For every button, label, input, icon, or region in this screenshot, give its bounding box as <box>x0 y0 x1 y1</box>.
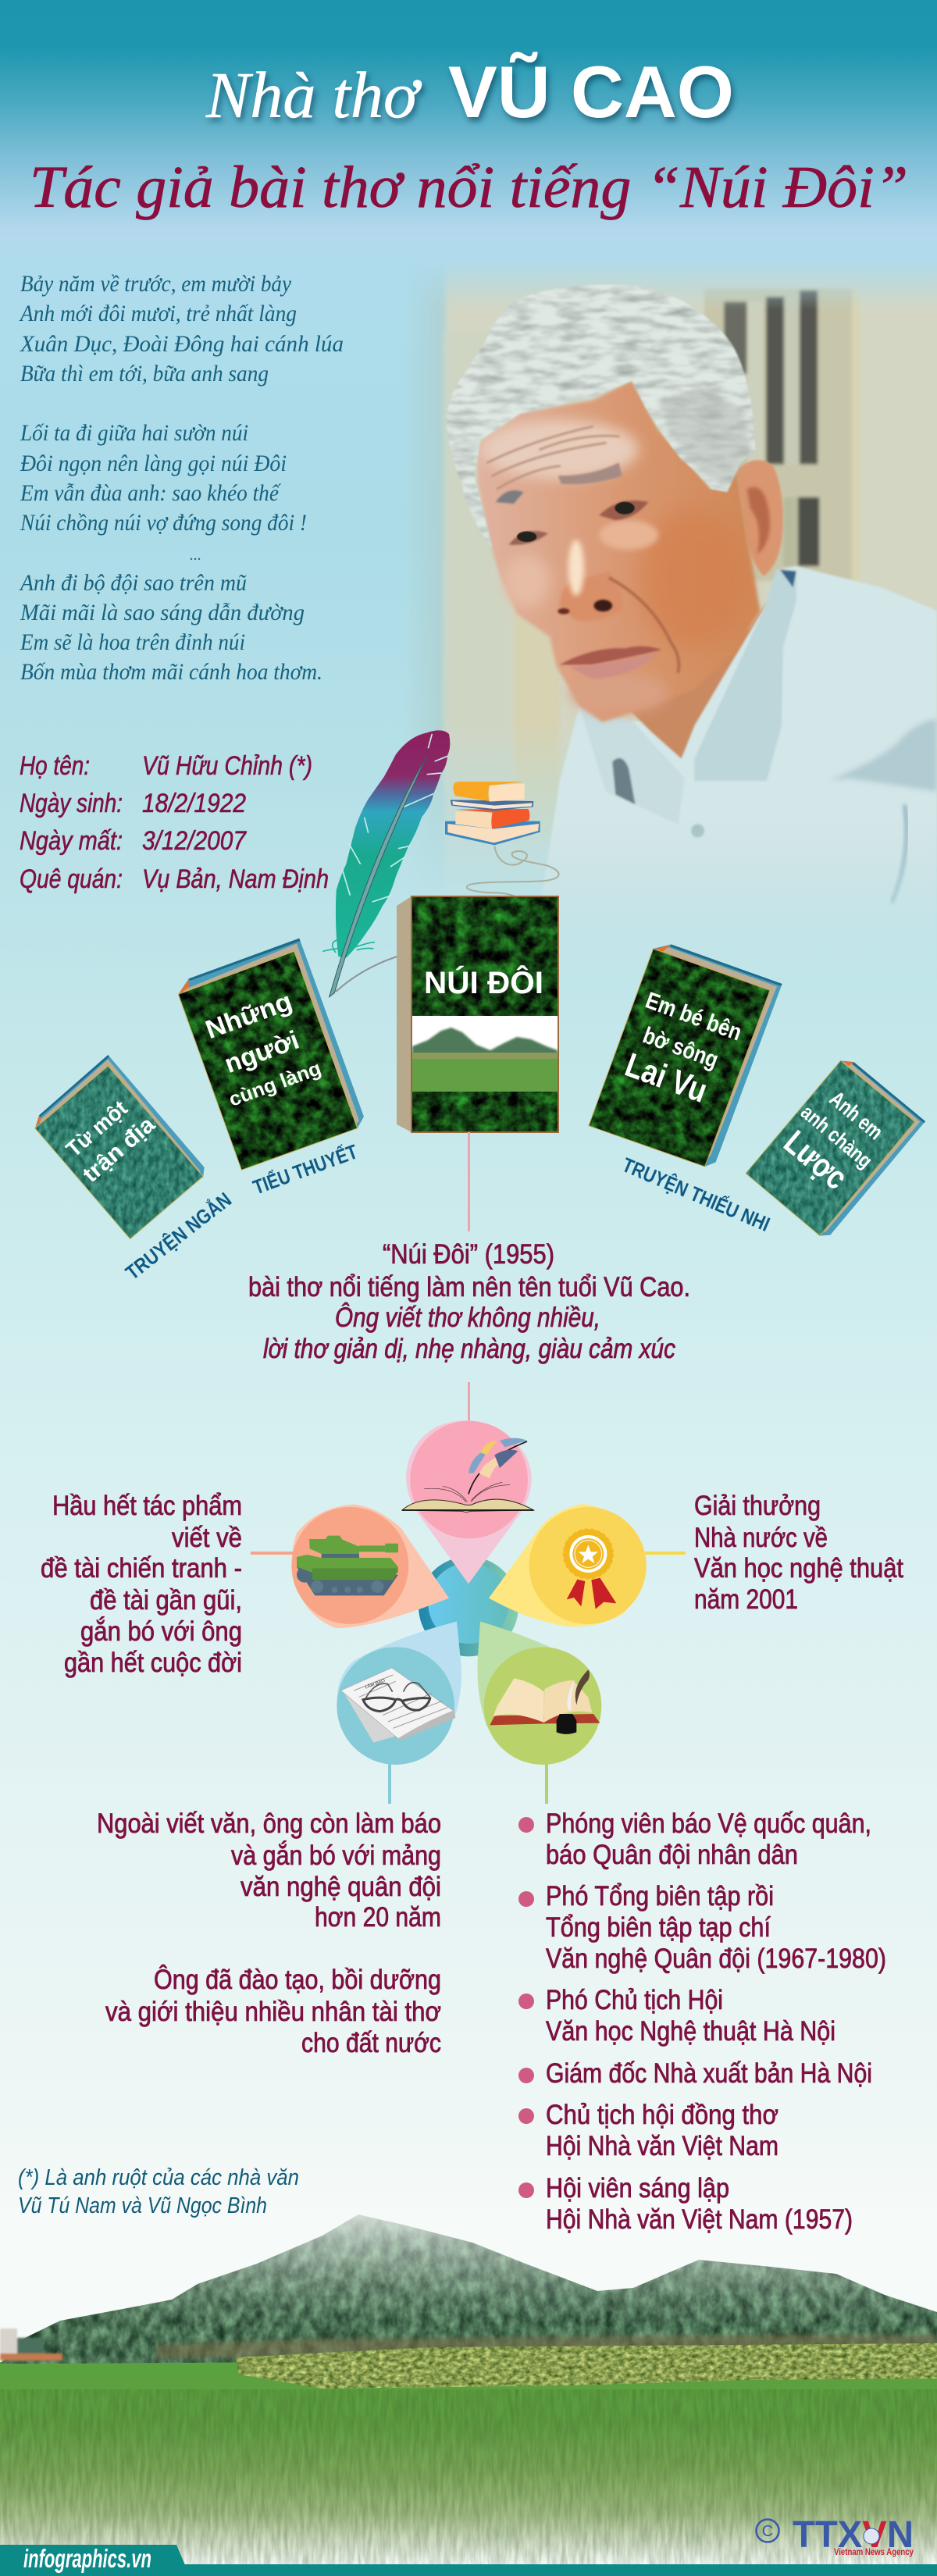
landscape: Núi Đôi hills and rice field <box>0 2214 937 2564</box>
text: journalism and mentoring: và giới thiệu nhiều nhân tài thơ <box>105 1997 441 2027</box>
biographical facts: Ngày sinh: <box>20 789 123 818</box>
flower diagram <box>291 1420 647 1765</box>
list: career positions: Chủ tịch hội đồng thơ <box>546 2100 778 2130</box>
list: career positions: báo Quân đội nhân dân <box>546 1840 798 1870</box>
nose <box>560 571 622 621</box>
list: career positions: Phóng viên báo Vệ quốc quân, <box>546 1808 871 1839</box>
petal: green, writing <box>477 1622 601 1765</box>
copyright logo: TTXVN: TTXVN <box>793 2514 914 2556</box>
label: TIỂU THUYẾT: TIỂU THUYẾT <box>250 1139 361 1199</box>
poem excerpt: Bốn mùa thơm mãi cánh hoa thơm. <box>20 659 322 685</box>
text: journalism and mentoring: Ông đã đào tạo, bồi dưỡng <box>154 1965 441 1995</box>
book: Những người cùng làng: người <box>221 1026 303 1079</box>
book: Núi Đôi (center): NÚI ĐÔI <box>424 964 543 1000</box>
list: career positions: Phó Tổng biên tập rồi <box>546 1881 774 1912</box>
copyright logo: TTXVN: C <box>762 2523 773 2540</box>
list: career positions: Giám đốc Nhà xuất bản Hà Nội <box>546 2058 872 2089</box>
text: state award <box>694 1491 903 1615</box>
book: Từ một trận địa: trận địa <box>78 1111 160 1188</box>
petal: blue, journalism <box>337 1622 461 1765</box>
poem excerpt: Bảy năm về trước, em mười bảy <box>20 271 292 297</box>
list: career positions <box>518 1808 886 2235</box>
connector line: book to text <box>468 1132 470 1231</box>
footnote <box>18 2165 299 2218</box>
biographical facts: 18/2/1922 <box>142 789 246 818</box>
text: Núi Đôi description: Ông viết thơ không nhiều, <box>335 1302 600 1333</box>
connector: yellow petal <box>645 1552 686 1555</box>
icon: quill feather and books <box>322 730 559 997</box>
text: war theme: gắn bó với ông <box>80 1616 242 1647</box>
book: Anh em anh chàng Lược: Anh em <box>825 1086 888 1145</box>
hub <box>419 1556 518 1656</box>
neck <box>625 600 767 758</box>
eyebrows <box>496 490 523 504</box>
text: war theme: Hầu hết tác phẩm <box>52 1491 242 1521</box>
book: Em bé bên bờ sông Lai Vu: Em bé bên <box>642 988 745 1046</box>
list: career positions: Tổng biên tập tạp chí <box>546 1912 771 1943</box>
title: Nhà thơ VŨ CAO <box>205 51 734 133</box>
biographical facts: Họ tên: <box>20 751 90 781</box>
biographical facts: Ngày mất: <box>20 826 123 856</box>
book: Anh em anh chàng Lược <box>746 1060 925 1236</box>
biographical facts: Vụ Bản, Nam Định <box>142 864 329 894</box>
book: Anh em anh chàng Lược: Lược <box>777 1124 854 1197</box>
text: state award: Văn học nghệ thuật <box>694 1553 903 1584</box>
biographical facts: Quê quán: <box>20 864 123 894</box>
book: Em bé bên bờ sông Lai Vu: Lai Vu <box>620 1046 712 1110</box>
poem excerpt: Em vẫn đùa anh: sao khéo thế <box>20 480 281 506</box>
petal: pink, poetry <box>402 1420 533 1584</box>
poem excerpt <box>19 271 344 685</box>
poem excerpt: Anh mới đôi mươi, trẻ nhất làng <box>19 301 297 326</box>
window frame <box>704 288 860 584</box>
text: Núi Đôi description: bài thơ nổi tiếng làm nên tên tuổi Vũ Cao. <box>248 1272 690 1302</box>
text: journalism and mentoring: văn nghệ quân đội <box>240 1872 441 1902</box>
connector: orange petal <box>251 1552 294 1555</box>
title: Nhà thơ VŨ CAO: VŨ CAO <box>448 51 734 133</box>
footnote: Vũ Tú Nam và Vũ Ngọc Bình <box>18 2193 267 2218</box>
book cover photo band <box>412 1016 558 1092</box>
hair <box>447 285 755 548</box>
rice field <box>0 2362 937 2564</box>
book: Những người cùng làng: Những <box>201 987 296 1045</box>
text: Núi Đôi description: lời thơ giản dị, nhẹ nhàng, giàu cảm xúc <box>263 1334 675 1364</box>
petal: orange, war theme <box>291 1505 449 1628</box>
text: journalism and mentoring: hơn 20 năm <box>315 1902 441 1933</box>
text: journalism and mentoring: cho đất nước <box>301 2028 441 2058</box>
ear <box>737 460 783 576</box>
text: war theme: viết về <box>172 1523 242 1553</box>
book: Những người cùng làng: cùng làng <box>226 1057 324 1111</box>
book: Những người cùng làng <box>178 939 364 1170</box>
footnote: (*) Là anh ruột của các nhà văn <box>18 2165 299 2190</box>
poem excerpt: Núi chồng núi vợ đứng song đôi ! <box>20 510 307 536</box>
book: Em bé bên bờ sông Lai Vu: bờ sông <box>640 1022 721 1074</box>
list: career positions: Hội Nhà văn Việt Nam (1957) <box>546 2204 853 2235</box>
petal: yellow, award <box>489 1504 647 1626</box>
copyright logo: TTXVN: Vietnam News Agency <box>834 2546 914 2557</box>
biographical facts <box>20 751 329 894</box>
text: state award: Nhà nước về <box>694 1523 828 1553</box>
label: TRUYỆN THIẾU NHI: TRUYỆN THIẾU NHI <box>619 1153 773 1236</box>
shirt <box>542 565 937 919</box>
eyes <box>599 501 648 520</box>
book: Từ một trận địa: Từ một <box>62 1096 132 1162</box>
poem excerpt: Đôi ngọn nên làng gọi núi Đôi <box>20 451 287 476</box>
label: TRUYỆN NGẮN: TRUYỆN NGẮN <box>121 1188 236 1284</box>
text: Núi Đôi description <box>248 1239 690 1364</box>
connector: blue petal <box>388 1764 391 1804</box>
poem excerpt: Mãi mãi là sao sáng dẫn đường <box>20 600 305 625</box>
poem excerpt: Bữa thì em tới, bữa anh sang <box>20 361 269 387</box>
title: Nhà thơ VŨ CAO: Nhà thơ <box>205 59 422 132</box>
icon: medal <box>564 1529 616 1609</box>
connector: green petal <box>545 1764 548 1804</box>
lips <box>560 647 661 664</box>
book: Núi Đôi (center) <box>397 896 558 1132</box>
icon: tank <box>297 1536 398 1595</box>
poem excerpt: ... <box>190 547 201 564</box>
portrait photo of poet Vũ Cao <box>415 267 937 919</box>
footer bar: infographics.vn <box>23 2544 151 2573</box>
subtitle: Tác giả bài thơ nổi tiếng “Núi Đôi” <box>30 155 908 220</box>
text: state award: năm 2001 <box>694 1584 798 1615</box>
text: war theme: đề tài gần gũi, <box>90 1585 242 1616</box>
list: career positions: Hội Nhà văn Việt Nam <box>546 2131 778 2161</box>
text: journalism and mentoring <box>97 1808 441 2058</box>
book: Anh em anh chàng Lược: anh chàng <box>796 1100 877 1173</box>
icon: newspaper and glasses <box>341 1668 455 1743</box>
footer bar <box>0 2544 937 2576</box>
list: career positions: Văn nghệ Quân đội (1967-1980) <box>546 1944 886 1974</box>
book: Từ một trận địa <box>35 1055 205 1239</box>
text: war theme: đề tài chiến tranh - <box>41 1553 242 1584</box>
text: state award: Giải thưởng <box>694 1491 821 1521</box>
houses at left edge <box>0 2328 62 2360</box>
text: Núi Đôi description: “Núi Đôi” (1955) <box>383 1239 554 1270</box>
connector line: text to flower <box>468 1382 470 1423</box>
poem excerpt: Em sẽ là hoa trên đỉnh núi <box>20 629 245 655</box>
biographical facts: Vũ Hữu Chỉnh (*) <box>142 751 312 781</box>
list: career positions: Phó Chủ tịch Hội <box>546 1985 723 2015</box>
book: Em bé bên bờ sông Lai Vu <box>589 944 782 1167</box>
poem excerpt: Anh đi bộ đội sao trên mũ <box>19 570 247 596</box>
tree trunks and soil <box>156 2335 937 2358</box>
forehead wrinkles <box>487 426 619 489</box>
poem excerpt: Lối ta đi giữa hai sườn núi <box>20 420 248 446</box>
text: journalism and mentoring: Ngoài viết văn, ông còn làm báo <box>97 1808 441 1839</box>
text: war theme: gần hết cuộc đời <box>64 1648 242 1678</box>
face <box>478 380 761 722</box>
biographical facts: 3/12/2007 <box>142 826 247 856</box>
reeds and shrubs <box>236 2343 937 2389</box>
text: journalism and mentoring: và gắn bó với mảng <box>231 1840 441 1871</box>
list: career positions: Văn học Nghệ thuật Hà Nội <box>546 2016 835 2047</box>
icon: open book and inkwell <box>490 1669 600 1734</box>
list: career positions: Hội viên sáng lập <box>546 2173 729 2204</box>
icon: newspaper and glasses: LÀM BÁO <box>365 1678 386 1691</box>
text: war theme <box>41 1491 242 1678</box>
poem excerpt: Xuân Dục, Đoài Đông hai cánh lúa <box>20 331 344 357</box>
